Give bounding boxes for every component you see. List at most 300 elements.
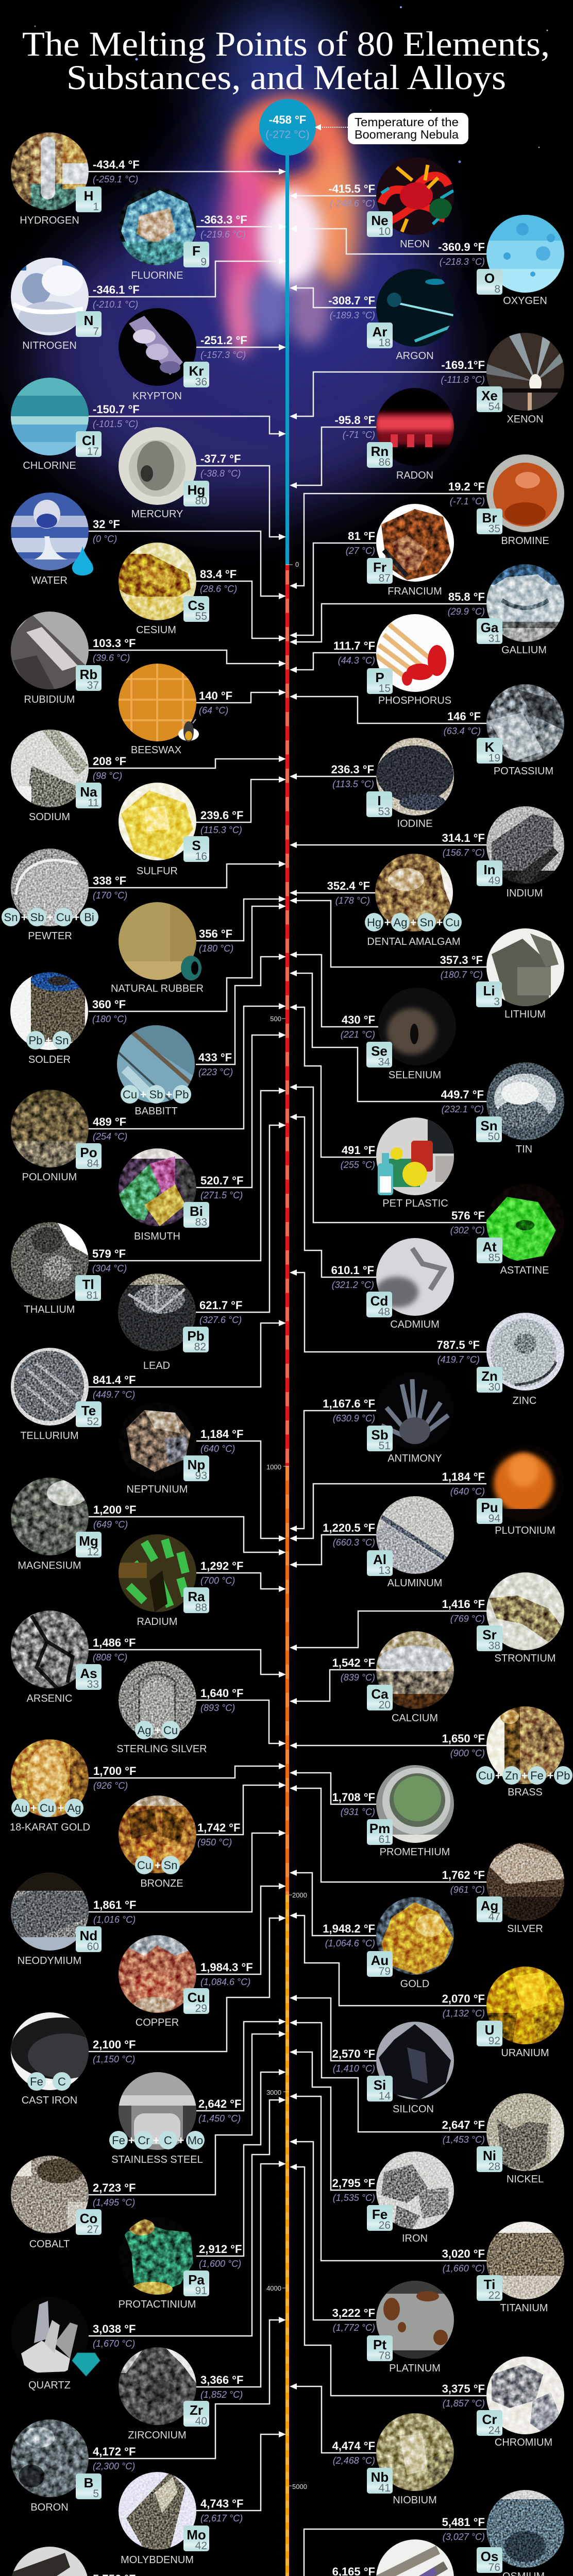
alloy elements: dental amalgam: Sn: [420, 916, 433, 929]
fahrenheit: hydrogen: -434.4 °F: [93, 158, 140, 171]
photo: thallium: [11, 1222, 89, 1300]
celsius: tellurium: (449.7 °C): [93, 1389, 135, 1400]
photo: nitrogen: [11, 258, 89, 335]
badge: K: K: [485, 739, 495, 755]
celsius: bismuth: (271.5 °C): [200, 1190, 243, 1200]
celsius: sodium: (98 °C): [93, 771, 122, 781]
name: xenon: XENON: [507, 414, 544, 425]
badge: Bi: 83: [195, 1216, 207, 1228]
name: potassium: POTASSIUM: [494, 766, 553, 777]
photo: dental amalgam: [375, 854, 453, 931]
photo: nickel: [486, 2093, 564, 2171]
badge: Sb: [367, 1426, 393, 1452]
alloy elements: stainless steel: +: [153, 2134, 159, 2147]
alloy elements: stainless steel: Fe: [112, 2134, 125, 2147]
name: silver: SILVER: [507, 1923, 543, 1935]
fahrenheit: copper: 1,984.3 °F: [200, 1961, 253, 1974]
alloy elements: pewter: Cu: [56, 911, 71, 924]
badge: Fe: [367, 2205, 393, 2231]
photo: potassium: [486, 684, 564, 762]
connector: babbitt: [196, 957, 279, 1064]
name: 18-karat gold: 18-KARAT GOLD: [10, 1822, 90, 1833]
badge: At: At: [482, 1239, 497, 1255]
photo: zinc: [486, 1313, 564, 1391]
celsius: cadmium: (321.2 °C): [332, 1280, 374, 1290]
panel: indium: [297, 806, 564, 899]
badge: Sb: 51: [379, 1440, 391, 1452]
connector: bronze: [196, 1785, 279, 1835]
badge: Nd: 60: [87, 1941, 99, 1953]
name: quartz: QUARTZ: [28, 2380, 71, 2391]
name: cadmium: CADMIUM: [390, 1319, 440, 1330]
panel: phosphorus: [297, 614, 454, 706]
badge: Zn: Zn: [481, 1368, 498, 1384]
badge: Zr: 40: [195, 2415, 207, 2427]
celsius: sulfur: (115.3 °C): [200, 825, 242, 835]
photo: chlorine: [11, 378, 89, 455]
panel: tin: [297, 973, 564, 1155]
connector: protactinium: [196, 2072, 279, 2256]
alloy elements: babbitt: [121, 1085, 191, 1104]
panel: antimony: [297, 1371, 454, 1529]
badge: Ti: 22: [488, 2290, 500, 2301]
photo: fluorine: [119, 188, 196, 265]
alloy elements: cast iron: Fe: [30, 2075, 43, 2088]
connector: neptunium: [196, 1441, 279, 1538]
badge: Ar: 18: [379, 337, 391, 349]
alloy elements: pewter: Bi: [84, 911, 94, 924]
alloy elements: sterling silver: [135, 1721, 180, 1739]
badge: Cr: 24: [488, 2425, 500, 2436]
fahrenheit: silver: 1,762 °F: [442, 1869, 485, 1882]
alloy elements: brass: +: [521, 1769, 528, 1782]
photo: lithium: [486, 928, 564, 1006]
fahrenheit: lead: 621.7 °F: [199, 1299, 242, 1312]
panel: chromium: [297, 2167, 564, 2448]
badge: H: H: [84, 188, 93, 204]
name: bismuth: BISMUTH: [134, 1231, 180, 1242]
badge: Ni: 28: [488, 2161, 500, 2173]
photo: tellurium: [11, 1348, 89, 1426]
fahrenheit: thallium: 579 °F: [92, 1247, 126, 1260]
name: astatine: ASTATINE: [500, 1265, 549, 1276]
fahrenheit: sulfur: 239.6 °F: [200, 809, 243, 822]
fahrenheit: rubidium: 103.3 °F: [93, 637, 136, 650]
connector: 18-karat gold: [89, 1766, 279, 1778]
connector: polonium: [89, 1006, 279, 1129]
panel: gallium: [297, 564, 564, 656]
celsius: beeswax: (64 °C): [199, 705, 228, 716]
photo: neon: [376, 157, 454, 235]
fahrenheit: fluorine: -363.3 °F: [200, 213, 247, 226]
connector: argon: [297, 288, 376, 308]
alloy elements: 18-karat gold: +: [58, 1802, 64, 1815]
celsius: iodine: (113.5 °C): [332, 779, 374, 789]
fahrenheit: natural rubber: 356 °F: [199, 927, 232, 940]
fahrenheit: dental amalgam: 352.4 °F: [327, 879, 370, 892]
panel: babbitt: [117, 957, 279, 1117]
panel: krypton: [119, 308, 279, 402]
icon: diamond: [72, 2353, 100, 2376]
name: sodium: SODIUM: [29, 811, 70, 823]
badge: Ne: 10: [379, 226, 391, 238]
celsius: selenium: (221 °C): [341, 1029, 375, 1040]
badge: Rb: Rb: [80, 667, 97, 682]
connector: gold: [297, 1873, 376, 1936]
photo: rhenium: [11, 2547, 89, 2576]
badge: Pa: 91: [195, 2285, 207, 2297]
name: protactinium: PROTACTINIUM: [119, 2299, 196, 2310]
celsius: natural rubber: (180 °C): [199, 943, 233, 954]
connector: quartz: [89, 2100, 279, 2336]
name: sulfur: SULFUR: [137, 866, 178, 877]
connector: nickel: [297, 2023, 486, 2132]
connector: calcium: [297, 1670, 376, 1701]
fahrenheit: potassium: 146 °F: [447, 710, 481, 723]
fahrenheit: zinc: 787.5 °F: [437, 1338, 480, 1351]
panel: hydrogen: [11, 132, 279, 226]
fahrenheit: cobalt: 2,723 °F: [93, 2181, 136, 2194]
fahrenheit: 18-karat gold: 1,700 °F: [93, 1765, 136, 1777]
connector: iron: [297, 2052, 376, 2190]
celsius: quartz: (1,670 °C): [93, 2338, 135, 2349]
badge: As: 33: [87, 1679, 99, 1690]
badge: H: [76, 187, 102, 213]
celsius: arsenic: (808 °C): [93, 1652, 127, 1663]
celsius: babbitt: (223 °C): [198, 1067, 233, 1077]
fahrenheit: neptunium: 1,184 °F: [200, 1428, 243, 1440]
panel: molybdenum: [119, 2434, 279, 2566]
photo: promethium: [376, 1765, 454, 1843]
celsius: gallium: (29.9 °C): [448, 606, 485, 617]
badge: Na: Na: [80, 784, 97, 800]
badge: Pa: Pa: [188, 2272, 205, 2287]
name: oxygen: OXYGEN: [503, 295, 547, 307]
photo: selenium: [378, 988, 456, 1065]
celsius: 18-karat gold: (926 °C): [93, 1781, 128, 1791]
name: krypton: KRYPTON: [132, 391, 182, 402]
icon: tire: [181, 956, 201, 980]
connector: beeswax: [196, 692, 279, 703]
icon: bee: [178, 719, 199, 742]
alloy elements: pewter: +: [21, 911, 27, 924]
photo: radon: [376, 388, 454, 466]
photo: francium: [376, 504, 454, 582]
connector: nitrogen: [89, 261, 279, 297]
name: cast iron: CAST IRON: [22, 2095, 77, 2106]
badge: Pb: Pb: [187, 1328, 205, 1344]
badge: Sn: [476, 1116, 502, 1143]
name: neptunium: NEPTUNIUM: [127, 1484, 188, 1495]
connector: radon: [297, 427, 376, 485]
alloy elements: sterling silver: Ag: [138, 1724, 151, 1737]
fahrenheit: uranium: 2,070 °F: [442, 1992, 485, 2005]
panel: mercury: [119, 427, 279, 537]
badge: I: I: [377, 793, 381, 808]
panel: bronze: [119, 1785, 279, 1889]
alloy elements: stainless steel: +: [128, 2134, 134, 2147]
name: pewter: PEWTER: [28, 930, 72, 942]
panel: boron: [11, 2320, 279, 2513]
panel: beeswax: [119, 664, 279, 756]
fahrenheit: chromium: 3,375 °F: [442, 2382, 485, 2395]
photo: xenon: [486, 333, 564, 411]
alloy elements: solder: +: [45, 1034, 52, 1047]
name: aluminum: ALUMINUM: [387, 1578, 442, 1589]
top marker: Boomerang Nebula: -458 °F: [269, 113, 306, 126]
panel: protactinium: [119, 2072, 279, 2310]
badge: N: 7: [93, 326, 99, 337]
badge: Ca: Ca: [371, 1686, 389, 1702]
temperature scale axis: 0: [295, 561, 299, 568]
badge: Cs: 55: [195, 611, 207, 622]
panel: neodymium: [11, 1833, 279, 1967]
badge: Cl: [76, 431, 102, 457]
fahrenheit: aluminum: 1,220.5 °F: [323, 1521, 375, 1534]
photo: zirconium: [119, 2347, 196, 2425]
celsius: krypton: (-157.3 °C): [200, 350, 246, 360]
badge: Nd: [76, 1926, 102, 1953]
fahrenheit: sterling silver: 1,640 °F: [200, 1687, 243, 1700]
fahrenheit: radium: 1,292 °F: [200, 1560, 243, 1572]
badge: Os: 76: [488, 2562, 500, 2573]
photo: copper: [119, 1935, 196, 2013]
photo: iodine: [376, 738, 454, 816]
celsius: francium: (27 °C): [346, 546, 375, 556]
callout: Boomerang Nebula: Boomerang Nebula: [355, 128, 459, 141]
panel: plutonium: [297, 1445, 564, 1538]
name: tellurium: TELLURIUM: [20, 1430, 79, 1442]
connector: chlorine: [89, 416, 279, 434]
badge: Co: [76, 2209, 102, 2235]
badge: U: 92: [488, 2035, 500, 2047]
fahrenheit: cesium: 83.4 °F: [200, 568, 237, 581]
photo: tungsten: [376, 2539, 454, 2576]
connector: francium: [297, 543, 376, 635]
name: uranium: URANIUM: [501, 2047, 549, 2059]
badge: Rn: Rn: [371, 444, 389, 459]
photo: natural rubber: [119, 902, 196, 980]
badge: Ra: Ra: [188, 1589, 205, 1604]
name: arsenic: ARSENIC: [27, 1693, 72, 1704]
celsius: lithium: (180.7 °C): [441, 970, 483, 980]
badge: F: [183, 242, 209, 268]
badge: Ga: Ga: [481, 620, 499, 635]
connector: niobium: [297, 2386, 376, 2453]
name: strontium: STRONTIUM: [495, 1653, 555, 1664]
fahrenheit: bronze: 1,742 °F: [197, 1821, 240, 1834]
badge: Kr: 36: [195, 376, 207, 388]
badge: Ar: Ar: [373, 324, 387, 340]
fahrenheit: protactinium: 2,912 °F: [199, 2243, 242, 2256]
connector: silicon: [297, 1998, 376, 2061]
panel: xenon: [297, 333, 564, 425]
panel: chlorine: [11, 378, 279, 471]
photo: astatine: [486, 1184, 564, 1262]
temperature scale axis: 1000: [266, 1463, 281, 1471]
badge: Po: [76, 1143, 102, 1170]
fahrenheit: pewter: 338 °F: [93, 874, 126, 887]
badge: Sr: Sr: [482, 1627, 497, 1642]
badge: Te: 52: [87, 1416, 99, 1428]
panel: strontium: [297, 1572, 564, 1664]
celsius: osmium: (3,027 °C): [443, 2532, 485, 2542]
alloy elements: pewter: [2, 908, 98, 926]
alloy elements: bronze: Sn: [164, 1859, 177, 1872]
panel: neon: [297, 157, 454, 250]
name: hydrogen: HYDROGEN: [20, 215, 79, 226]
celsius: zinc: (419.7 °C): [437, 1354, 480, 1365]
connector: titanium: [297, 2096, 486, 2261]
celsius: strontium: (769 °C): [450, 1614, 485, 1624]
photo: antimony: [376, 1371, 454, 1449]
title: The Melting Points of 80 Elements,: [22, 24, 550, 63]
alloy elements: sterling silver: Cu: [163, 1724, 178, 1737]
connector: thallium: [89, 1091, 279, 1261]
photo: uranium: [486, 1967, 564, 2044]
badge: Mg: 12: [87, 1546, 99, 1558]
name: tin: TIN: [516, 1144, 532, 1155]
name: water: WATER: [31, 575, 68, 586]
badge: Ne: Ne: [371, 213, 389, 228]
panel: potassium: [297, 684, 564, 777]
badge: Br: 35: [488, 523, 500, 535]
badge: Zr: [183, 2401, 209, 2427]
badge: Sr: 38: [488, 1640, 500, 1652]
fahrenheit: water: 32 °F: [93, 518, 120, 531]
celsius: solder: (180 °C): [92, 1014, 127, 1024]
connector: bromine: [297, 494, 486, 586]
panel: zinc: [297, 1273, 564, 1406]
badge: Tl: Tl: [82, 1277, 94, 1292]
celsius: silver: (961 °C): [450, 1885, 485, 1895]
name: neodymium: NEODYMIUM: [18, 1955, 81, 1967]
badge: Rb: 37: [87, 680, 99, 691]
badge: Np: 93: [195, 1470, 207, 1482]
photo: neptunium: [119, 1402, 196, 1480]
badge: Ar: [367, 323, 393, 349]
connector: plutonium: [297, 1484, 486, 1538]
badge: Ti: [477, 2275, 502, 2301]
badge: Ne: [367, 211, 393, 238]
badge: Se: 34: [378, 1056, 390, 1068]
panel: dental amalgam: [297, 854, 462, 947]
badge: Bi: [183, 1202, 209, 1228]
badge: Se: Se: [371, 1043, 387, 1059]
badge: Hg: 80: [195, 495, 207, 507]
photo: titanium: [486, 2222, 564, 2299]
celsius: polonium: (254 °C): [93, 1131, 127, 1142]
panel: solder: [10, 906, 279, 1065]
name: magnesium: MAGNESIUM: [18, 1560, 81, 1571]
badge: As: [76, 1664, 102, 1690]
badge: Ni: [477, 2146, 502, 2173]
callout: Boomerang Nebula: [315, 113, 468, 144]
celsius: phosphorus: (44.3 °C): [338, 655, 375, 666]
fahrenheit: chlorine: -150.7 °F: [93, 403, 140, 416]
connector: cobalt: [89, 2034, 279, 2195]
celsius: antimony: (630.9 °C): [333, 1413, 375, 1423]
panel: calcium: [297, 1631, 454, 1724]
name: radium: RADIUM: [137, 1616, 177, 1628]
alloy elements: 18-karat gold: Cu: [40, 1802, 54, 1815]
panel: zirconium: [119, 2164, 279, 2441]
panel: iodine: [297, 738, 454, 829]
panel: quartz: [11, 2100, 279, 2391]
fahrenheit: tin: 449.7 °F: [441, 1088, 484, 1101]
fahrenheit: titanium: 3,020 °F: [442, 2247, 485, 2260]
celsius: radium: (700 °C): [200, 1575, 235, 1586]
celsius: promethium: (931 °C): [341, 1807, 375, 1817]
badge: Mo: 42: [195, 2540, 207, 2552]
celsius: aluminum: (660.3 °C): [333, 1537, 375, 1548]
fahrenheit: zirconium: 3,366 °F: [200, 2374, 243, 2386]
name: iron: IRON: [402, 2233, 428, 2244]
fahrenheit: cadmium: 610.1 °F: [331, 1264, 374, 1277]
panel: astatine: [297, 1087, 564, 1276]
name: lithium: LITHIUM: [504, 1009, 546, 1020]
connector: bismuth: [196, 1035, 279, 1188]
badge: At: 85: [488, 1252, 500, 1264]
celsius: astatine: (302 °C): [450, 1225, 485, 1235]
fahrenheit: molybdenum: 4,743 °F: [200, 2497, 243, 2510]
badge: Kr: Kr: [189, 363, 204, 379]
alloy elements: babbitt: +: [140, 1088, 146, 1101]
fahrenheit: sodium: 208 °F: [93, 755, 126, 768]
alloy elements: solder: Sn: [55, 1034, 69, 1047]
celsius: iron: (1,535 °C): [333, 2193, 375, 2203]
photo: cesium: [119, 543, 196, 620]
celsius: neon: (-248.6 °C): [330, 198, 375, 209]
celsius: gold: (1,064.6 °C): [325, 1938, 375, 1948]
badge: Si: [367, 2076, 393, 2102]
connector: uranium: [297, 1916, 486, 2006]
fahrenheit: iodine: 236.3 °F: [331, 763, 374, 776]
badge: Zn: [477, 1367, 502, 1393]
name: cesium: CESIUM: [136, 624, 176, 636]
alloy elements: 18-karat gold: Ag: [68, 1802, 81, 1815]
name: calcium: CALCIUM: [392, 1713, 438, 1724]
nebula background: [34, 0, 548, 510]
badge: Np: Np: [188, 1457, 205, 1472]
alloy elements: pewter: +: [73, 911, 79, 924]
photo: boron: [11, 2419, 89, 2497]
connector: neon: [297, 195, 376, 196]
alloy elements: babbitt: Pb: [175, 1088, 189, 1101]
panel: sulfur: [119, 779, 279, 877]
fahrenheit: silicon: 2,570 °F: [332, 2047, 375, 2060]
celsius: boron: (2,300 °C): [93, 2461, 135, 2471]
badge: Na: 11: [88, 797, 99, 809]
alloy elements: bronze: +: [155, 1859, 161, 1872]
badge: Si: Si: [374, 2077, 386, 2093]
photo: polonium: [11, 1090, 89, 1167]
celsius: platinum: (1,772 °C): [333, 2323, 375, 2333]
name: phosphorus: PHOSPHORUS: [378, 695, 451, 706]
connector: hydrogen: [89, 171, 279, 172]
badge: In: In: [483, 862, 496, 877]
name: pet plastic: PET PLASTIC: [382, 1198, 448, 1209]
connector: tellurium: [89, 1323, 279, 1387]
badge: Ca: 20: [379, 1699, 391, 1711]
connector: neodymium: [89, 1833, 279, 1912]
badge: Cr: Cr: [482, 2412, 497, 2427]
celsius: nitrogen: (-210.1 °C): [93, 299, 138, 310]
photo: phosphorus: [376, 614, 454, 692]
badge: Po: 84: [87, 1158, 99, 1170]
badge: Rn: [367, 442, 393, 468]
panel: neptunium: [119, 1402, 279, 1538]
